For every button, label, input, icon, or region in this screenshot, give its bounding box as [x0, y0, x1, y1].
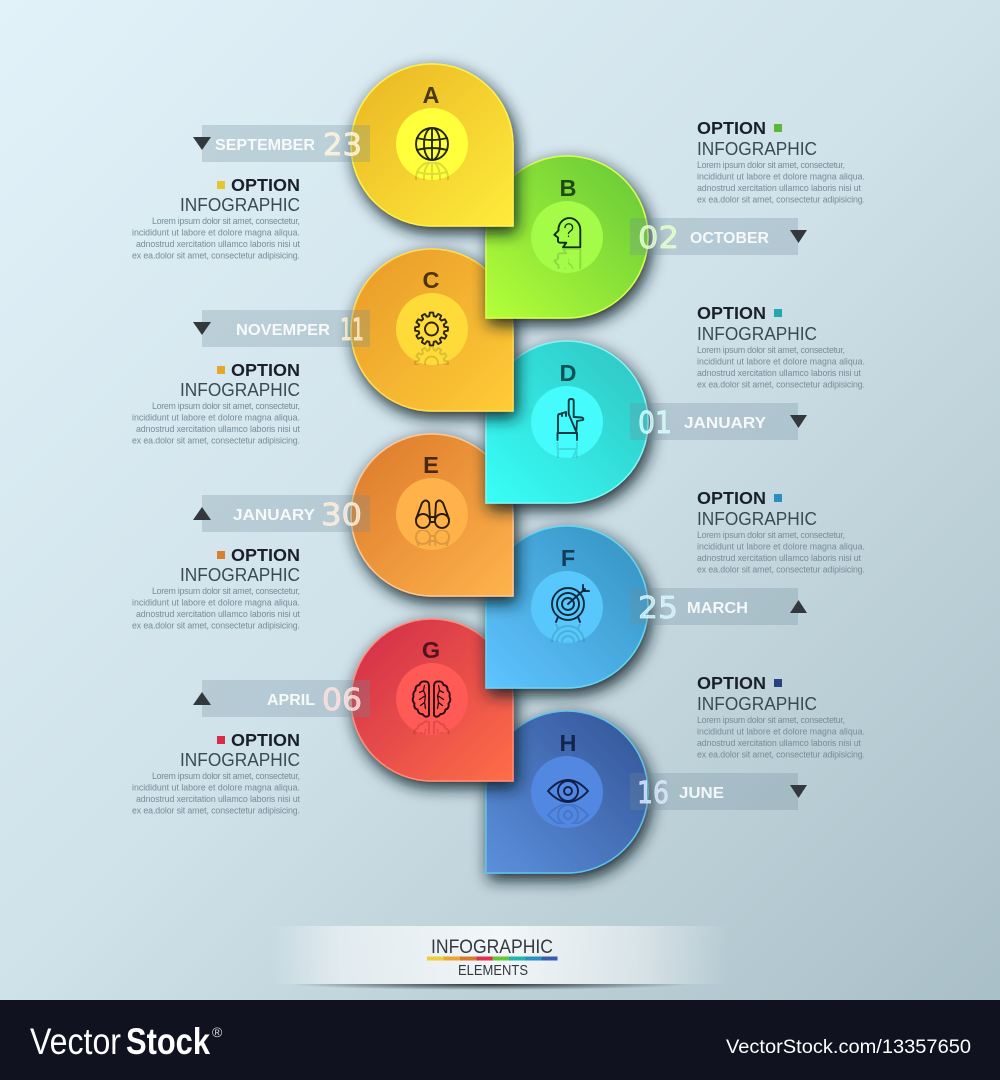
- pin G: [351, 619, 513, 781]
- text block D: [697, 303, 865, 390]
- text block F: [697, 488, 865, 574]
- text block E: adnostrud xercitation ullamco laboris nisi ut: [136, 609, 301, 619]
- text block G: ex ea.dolor sit amet, consectetur adipisicing.: [132, 806, 300, 816]
- text block C: OPTION: [231, 360, 300, 380]
- date label: January 30: JANUARY: [233, 507, 315, 524]
- text block F: OPTION: [697, 488, 766, 508]
- icon: target: [552, 585, 589, 622]
- pin E: E: [423, 452, 439, 478]
- date label: 25 March: 25: [638, 591, 678, 626]
- text block F: INFOGRAPHIC: [697, 509, 817, 529]
- text block B: OPTION: [697, 118, 766, 138]
- text block F: adnostrud xercitation ullamco laboris nisi ut: [697, 553, 862, 563]
- date label: November 11: [193, 310, 370, 348]
- footer bar: ®: [212, 1024, 223, 1040]
- icon: eye: [548, 780, 588, 802]
- footer bar: [0, 1000, 1000, 1080]
- text block D: INFOGRAPHIC: [697, 324, 817, 344]
- text block G: [132, 730, 301, 816]
- date label: 02 October: 02: [638, 221, 679, 256]
- text block G: OPTION: [231, 730, 300, 750]
- text block E: INFOGRAPHIC: [180, 565, 300, 585]
- text block E: incididunt ut labore et dolore magna aliqua.: [132, 598, 300, 608]
- text block C: ex ea.dolor sit amet, consectetur adipisicing.: [132, 436, 300, 446]
- text block E: [132, 545, 301, 630]
- text block F: incididunt ut labore et dolore magna aliqua.: [697, 542, 865, 552]
- text block F: ex ea.dolor sit amet, consectetur adipisicing.: [697, 564, 865, 574]
- text block E: ex ea.dolor sit amet, consectetur adipisicing.: [132, 620, 300, 630]
- pin E: [351, 434, 513, 596]
- icon: head with question: [554, 218, 580, 247]
- pin F: [486, 526, 648, 688]
- text block D: ex ea.dolor sit amet, consectetur adipisicing.: [697, 380, 865, 390]
- date label: September 23: [193, 125, 370, 163]
- date label: January 30: 30: [321, 498, 362, 533]
- date label: 16 June: 16: [637, 776, 669, 811]
- text block B: [697, 118, 865, 204]
- date label: April 06: [193, 680, 370, 718]
- date label: September 23: SEPTEMBER: [215, 137, 315, 154]
- pin H: H: [560, 730, 576, 756]
- text block H: adnostrud xercitation ullamco laboris nisi ut: [697, 738, 862, 748]
- text block H: incididunt ut labore et dolore magna aliqua.: [697, 726, 865, 736]
- icon: globe: [416, 128, 448, 160]
- text block B: Lorem ipsum dolor sit amet, consectetur,: [697, 160, 845, 170]
- date label: April 06: APRIL: [267, 692, 315, 709]
- text block C: adnostrud xercitation ullamco laboris nisi ut: [136, 424, 301, 434]
- pin B: B: [560, 175, 576, 201]
- text block H: [697, 673, 865, 760]
- date label: 01 January: [630, 403, 807, 441]
- pin C: [351, 249, 513, 411]
- date label: 16 June: [630, 773, 807, 811]
- text block H: ex ea.dolor sit amet, consectetur adipisicing.: [697, 750, 865, 760]
- pin A: [351, 64, 513, 226]
- banner: infographic elements: [290, 926, 706, 990]
- pin A: A: [423, 82, 440, 108]
- date label: 02 October: OCTOBER: [690, 230, 769, 247]
- text block A: OPTION: [231, 175, 300, 195]
- text block A: incididunt ut labore et dolore magna aliqua.: [132, 228, 300, 238]
- text block D: OPTION: [697, 303, 766, 323]
- pin B: [486, 156, 648, 318]
- text block A: adnostrud xercitation ullamco laboris nisi ut: [136, 239, 301, 249]
- text block H: Lorem ipsum dolor sit amet, consectetur,: [697, 715, 845, 725]
- text block H: OPTION: [697, 673, 766, 693]
- text block C: [132, 360, 301, 446]
- icon: brain: [413, 681, 450, 717]
- pin C: C: [423, 267, 440, 293]
- text block G: incididunt ut labore et dolore magna aliqua.: [132, 782, 300, 792]
- banner: infographic elements: INFOGRAPHIC: [431, 937, 553, 958]
- banner: infographic elements: ELEMENTS: [458, 963, 528, 979]
- date label: 02 October: [630, 218, 807, 256]
- text block A: INFOGRAPHIC: [180, 195, 300, 215]
- pin D: D: [560, 360, 576, 386]
- date label: January 30: [193, 495, 370, 533]
- text block G: Lorem ipsum dolor sit amet, consectetur,: [152, 771, 300, 781]
- text block F: Lorem ipsum dolor sit amet, consectetur,: [697, 530, 845, 540]
- text block C: INFOGRAPHIC: [180, 380, 300, 400]
- text block A: [132, 175, 301, 260]
- date label: November 11: NOVEMPER: [236, 322, 330, 339]
- date label: November 11: 11: [340, 313, 364, 348]
- text block A: Lorem ipsum dolor sit amet, consectetur,: [152, 216, 300, 226]
- text block C: incididunt ut labore et dolore magna aliqua.: [132, 412, 300, 422]
- text block G: adnostrud xercitation ullamco laboris nisi ut: [136, 794, 301, 804]
- text block B: INFOGRAPHIC: [697, 139, 817, 159]
- text block B: adnostrud xercitation ullamco laboris nisi ut: [697, 183, 862, 193]
- pin D: [486, 341, 648, 503]
- text block D: Lorem ipsum dolor sit amet, consectetur,: [697, 345, 845, 355]
- icon: binoculars: [416, 500, 449, 528]
- icon: pointing hand: [558, 399, 583, 440]
- pin G: G: [422, 637, 440, 663]
- pin F: F: [561, 545, 575, 571]
- footer bar: Stock: [126, 1021, 210, 1062]
- date label: 16 June: JUNE: [679, 785, 724, 802]
- pin H: [486, 711, 648, 873]
- date label: 25 March: [630, 588, 807, 626]
- text block D: adnostrud xercitation ullamco laboris nisi ut: [697, 368, 862, 378]
- icon: gear: [415, 313, 448, 345]
- footer bar: Vector: [30, 1021, 121, 1062]
- text block H: INFOGRAPHIC: [697, 694, 817, 714]
- date label: 25 March: MARCH: [687, 600, 748, 617]
- footer bar: VectorStock.com/13357650: [726, 1036, 971, 1058]
- text block E: Lorem ipsum dolor sit amet, consectetur,: [152, 586, 300, 596]
- date label: 01 January: JANUARY: [684, 415, 766, 432]
- date label: September 23: 23: [323, 128, 362, 163]
- text block G: INFOGRAPHIC: [180, 750, 300, 770]
- text block B: ex ea.dolor sit amet, consectetur adipisicing.: [697, 194, 865, 204]
- date label: 01 January: 01: [638, 406, 672, 441]
- text block C: Lorem ipsum dolor sit amet, consectetur,: [152, 401, 300, 411]
- date label: April 06: 06: [322, 683, 362, 718]
- text block E: OPTION: [231, 545, 300, 565]
- text block B: incididunt ut labore et dolore magna aliqua.: [697, 172, 865, 182]
- text block A: ex ea.dolor sit amet, consectetur adipisicing.: [132, 250, 300, 260]
- text block D: incididunt ut labore et dolore magna aliqua.: [697, 356, 865, 366]
